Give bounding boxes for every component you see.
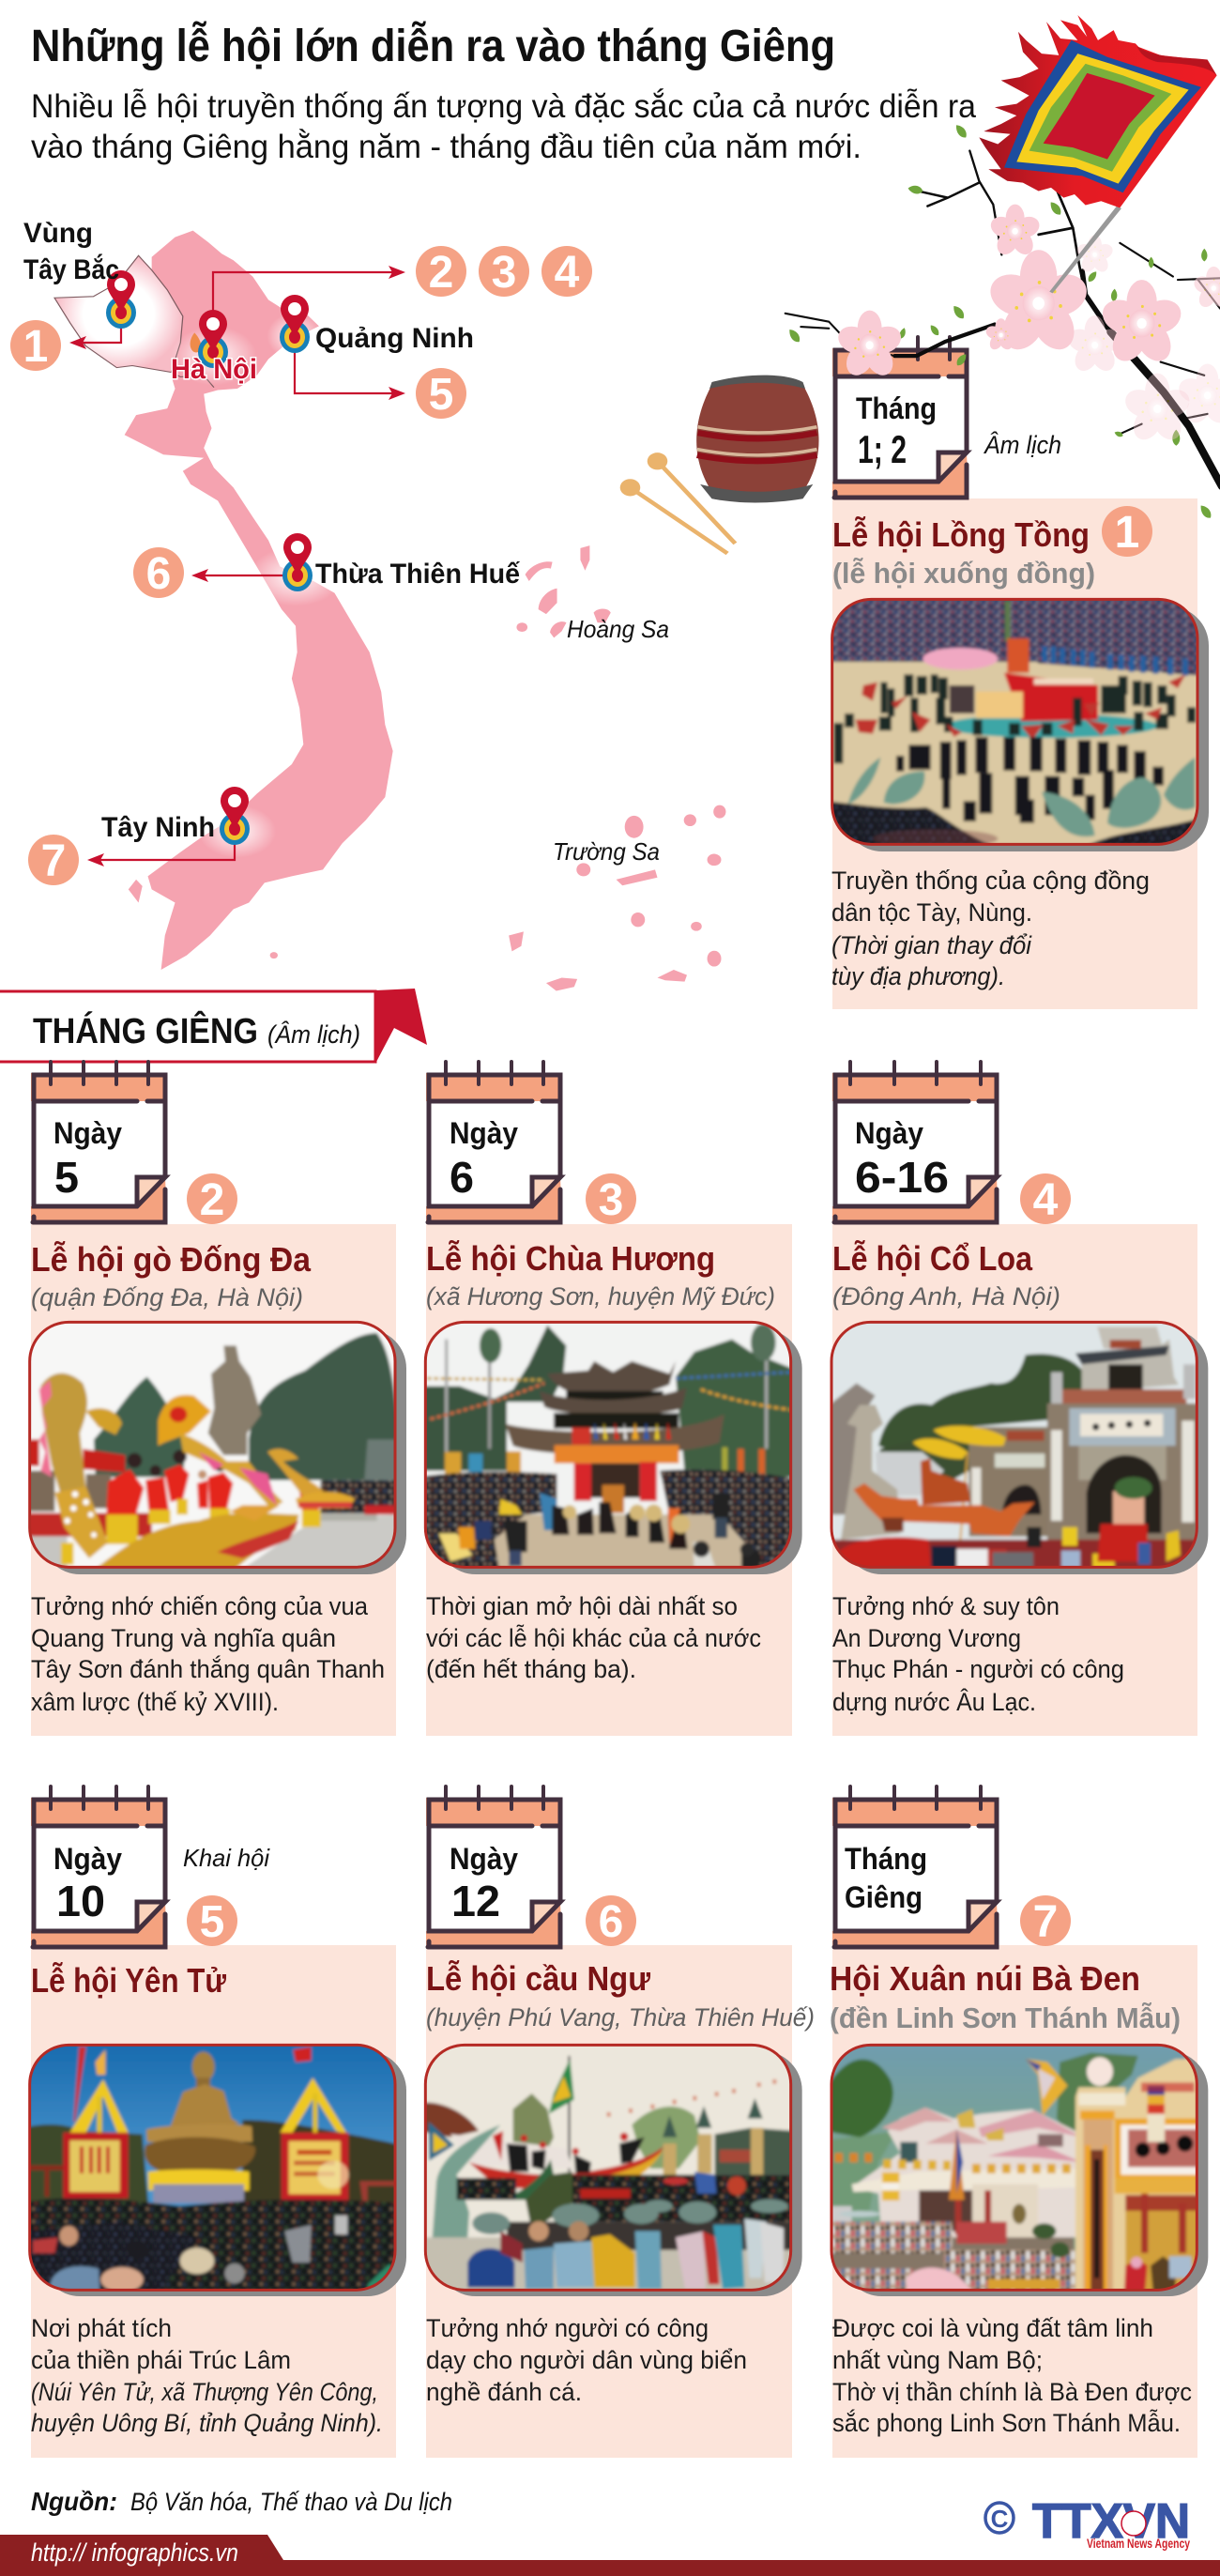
description: nghề đánh cá. <box>426 2378 582 2406</box>
connector arrows on map <box>69 266 405 866</box>
calendar: ngày 6-16 <box>832 1062 999 1224</box>
location: (quận Đống Đa, Hà Nội) <box>31 1283 303 1311</box>
badge 7 <box>1020 1895 1071 1947</box>
description <box>426 1592 761 1683</box>
map number badges: 3 <box>492 248 516 298</box>
heading: Lễ hội Cổ Loa <box>832 1239 1033 1278</box>
description: nhất vùng Nam Bộ; <box>832 2346 1043 2374</box>
panel: Lễ hội Chùa Hương <box>419 1062 802 1736</box>
panel: Lễ hội gò Đống Đa <box>23 1062 406 1736</box>
calendar: ngày 5: 5 <box>54 1153 79 1202</box>
note: khai hội: Khai hội <box>183 1844 270 1872</box>
islands labels <box>553 615 669 866</box>
map of Vietnam <box>54 231 725 991</box>
islands: Hoàng Sa and Trường Sa <box>509 545 725 991</box>
description <box>31 2314 383 2437</box>
calendar: tháng 1;2: Tháng <box>856 391 937 425</box>
description: huyện Uông Bí, tỉnh Quảng Ninh). <box>31 2409 383 2437</box>
photo: Lồng Tồng festival <box>826 591 1209 852</box>
description: xâm lược (thế kỷ XVIII). <box>31 1688 279 1716</box>
subheading: (đền Linh Sơn Thánh Mẫu) <box>830 2001 1181 2034</box>
calendar: tháng Giêng <box>832 1786 999 1949</box>
leaves <box>786 122 1213 520</box>
photo: boat procession <box>419 2037 802 2298</box>
badge 3 <box>586 1173 636 1225</box>
photo: dragon dance <box>23 1314 406 1575</box>
panel: Lễ hội Yên Tử <box>23 1786 406 2458</box>
badge 5: 5 <box>200 1897 224 1947</box>
calendar: ngày 5 <box>31 1062 167 1224</box>
calendar: tháng Giêng: Tháng <box>845 1842 927 1876</box>
badge 2 <box>187 1173 237 1225</box>
calendar: ngày 6-16: 6-16 <box>855 1153 949 1202</box>
badge 7: 7 <box>1033 1897 1058 1947</box>
blossoms <box>835 205 1220 446</box>
calendar: ngày 10: Ngày <box>53 1842 122 1876</box>
photo: Chùa Hương temple <box>419 1314 802 1575</box>
heading: Lễ hội gò Đống Đa <box>31 1240 312 1279</box>
logo: TTXVN: C <box>991 2505 1009 2533</box>
description: Tưởng nhớ người có công <box>426 2314 709 2342</box>
calendar: ngày 10: 10 <box>56 1877 105 1925</box>
description: với các lễ hội khác của cả nước <box>426 1623 761 1652</box>
islands labels: Hoàng Sa <box>567 615 669 643</box>
description: tùy địa phương). <box>831 962 1005 990</box>
description: Nơi phát tích <box>31 2314 172 2342</box>
panel: Lồng Tồng background <box>832 498 1197 1009</box>
map number badges: 5 <box>429 370 453 420</box>
badge 5 <box>187 1895 237 1947</box>
calendar: ngày 6 <box>426 1062 562 1224</box>
description: dựng nước Âu Lạc. <box>832 1687 1036 1716</box>
intro text <box>31 88 977 165</box>
description: Tưởng nhớ chiến công của vua <box>31 1592 369 1620</box>
calendar: ngày 12: 12 <box>451 1877 500 1925</box>
location pins <box>106 270 313 845</box>
source: Bộ Văn hóa, Thế thao và Du lịch <box>130 2488 452 2516</box>
description <box>426 2314 747 2406</box>
map labels <box>23 218 520 843</box>
badge 4: 4 <box>1033 1175 1059 1225</box>
intro text: Nhiều lễ hội truyền thống ấn tượng và đặc sắc của cả nước diễn ra <box>31 88 977 125</box>
map labels: Thừa Thiên Huế <box>315 559 520 590</box>
banner: tháng Giêng: (Âm lịch) <box>267 1020 360 1049</box>
description: Thờ vị thần chính là Bà Đen được <box>832 2378 1192 2406</box>
heading: Lễ hội Yên Tử <box>31 1961 227 2000</box>
map labels: Tây Ninh <box>101 812 215 843</box>
description <box>31 1592 385 1716</box>
description: (Núi Yên Tử, xã Thượng Yên Công, <box>31 2378 378 2406</box>
badge 4 <box>1020 1173 1071 1225</box>
map labels: Tây Bắc <box>23 253 119 285</box>
footer bar <box>0 2535 1220 2576</box>
photo: Bà Đen temple <box>825 2037 1208 2298</box>
intro text: vào tháng Giêng hằng năm - tháng đầu tiên của năm mới. <box>31 129 862 165</box>
logo: TTXVN: TTXVN <box>1032 2494 1190 2549</box>
calendar: tháng 1;2: 1; 2 <box>858 427 907 471</box>
description: Truyền thống của cộng đồng <box>831 866 1150 895</box>
map labels: Hà Nội <box>171 354 257 385</box>
map number badges: 1 <box>23 322 48 372</box>
icon: drum and sticks <box>620 376 819 554</box>
calendar: tháng 1;2 <box>832 337 968 499</box>
description: của thiền phái Trúc Lâm <box>31 2346 291 2374</box>
panel: Lễ hội cầu Ngư <box>419 1786 815 2458</box>
map number badges: 7 <box>41 836 66 886</box>
description: Được coi là vùng đất tâm linh <box>832 2314 1153 2342</box>
badge 1 <box>1102 506 1152 558</box>
panel: Lễ hội Cổ Loa <box>825 1062 1208 1736</box>
description: Quang Trung và nghĩa quân <box>31 1624 336 1652</box>
description <box>831 866 1150 990</box>
badge 2: 2 <box>200 1175 224 1225</box>
banner: tháng Giêng <box>0 989 427 1064</box>
branches, blossoms and flag <box>785 15 1220 520</box>
badge 6: 6 <box>599 1897 623 1947</box>
description: (đến hết tháng ba). <box>426 1655 636 1683</box>
map number badges: 4 <box>555 248 580 298</box>
map labels: Vùng <box>23 218 93 249</box>
note: âm lịch: Âm lịch <box>983 430 1061 459</box>
calendar: ngày 12 <box>426 1786 562 1949</box>
heading: Lễ hội Lồng Tồng <box>832 515 1090 554</box>
heading: Hội Xuân núi Bà Đen <box>830 1959 1140 1998</box>
description <box>832 2314 1192 2437</box>
description: An Dương Vương <box>832 1624 1021 1652</box>
calendar: ngày 5: Ngày <box>53 1116 122 1150</box>
footer bar: http:// infographics.vn <box>31 2538 238 2567</box>
description: dạy cho người dân vùng biển <box>426 2346 747 2374</box>
map labels: Quảng Ninh <box>315 323 474 354</box>
branches <box>785 151 1220 486</box>
map number badges: 2 <box>429 248 453 298</box>
panel: Lễ hội Lồng Tồng <box>826 506 1209 990</box>
badge 3: 3 <box>599 1175 623 1225</box>
description: Thục Phán - người có công <box>832 1655 1124 1683</box>
description: (Thời gian thay đổi <box>831 931 1032 959</box>
calendar: ngày 6: 6 <box>450 1153 474 1202</box>
badge 6 <box>586 1895 636 1947</box>
title: Những lễ hội lớn diễn ra vào tháng Giêng <box>31 21 835 71</box>
source: Nguồn: <box>31 2487 117 2516</box>
description: Tây Sơn đánh thắng quân Thanh <box>31 1654 385 1683</box>
description: Thời gian mở hội dài nhất so <box>426 1592 738 1620</box>
description: sắc phong Linh Sơn Thánh Mẫu. <box>832 2408 1181 2437</box>
photo: Cổ Loa gate <box>825 1314 1208 1575</box>
panel: Hội Xuân núi Bà Đen <box>825 1786 1208 2458</box>
photo: Yên Tử statue <box>23 2037 406 2298</box>
location: (Đông Anh, Hà Nội) <box>832 1282 1060 1311</box>
calendar: ngày 6-16: Ngày <box>855 1116 923 1150</box>
description: dân tộc Tày, Nùng. <box>831 898 1032 927</box>
calendar: ngày 10 <box>31 1786 167 1949</box>
calendar: ngày 12: Ngày <box>450 1842 518 1876</box>
calendar: ngày 6: Ngày <box>450 1116 518 1150</box>
icon: festival flag <box>979 15 1217 293</box>
source <box>31 2487 452 2516</box>
description <box>832 1592 1124 1716</box>
location: (xã Hương Sơn, huyện Mỹ Đức) <box>426 1282 775 1311</box>
description: Tưởng nhớ & suy tôn <box>832 1592 1060 1620</box>
calendar: tháng Giêng: Giêng <box>845 1880 923 1914</box>
heading: Lễ hội Chùa Hương <box>426 1239 715 1278</box>
badge 1: 1 <box>1115 508 1139 558</box>
location: (huyện Phú Vang, Thừa Thiên Huế) <box>426 2003 815 2032</box>
banner: tháng Giêng: THÁNG GIÊNG <box>33 1010 258 1051</box>
map number badges: 6 <box>146 549 171 599</box>
islands labels: Trường Sa <box>553 837 660 866</box>
map number badges <box>10 246 592 886</box>
heading: Lễ hội cầu Ngư <box>426 1959 651 1998</box>
subheading: (lễ hội xuống đồng) <box>832 557 1095 590</box>
